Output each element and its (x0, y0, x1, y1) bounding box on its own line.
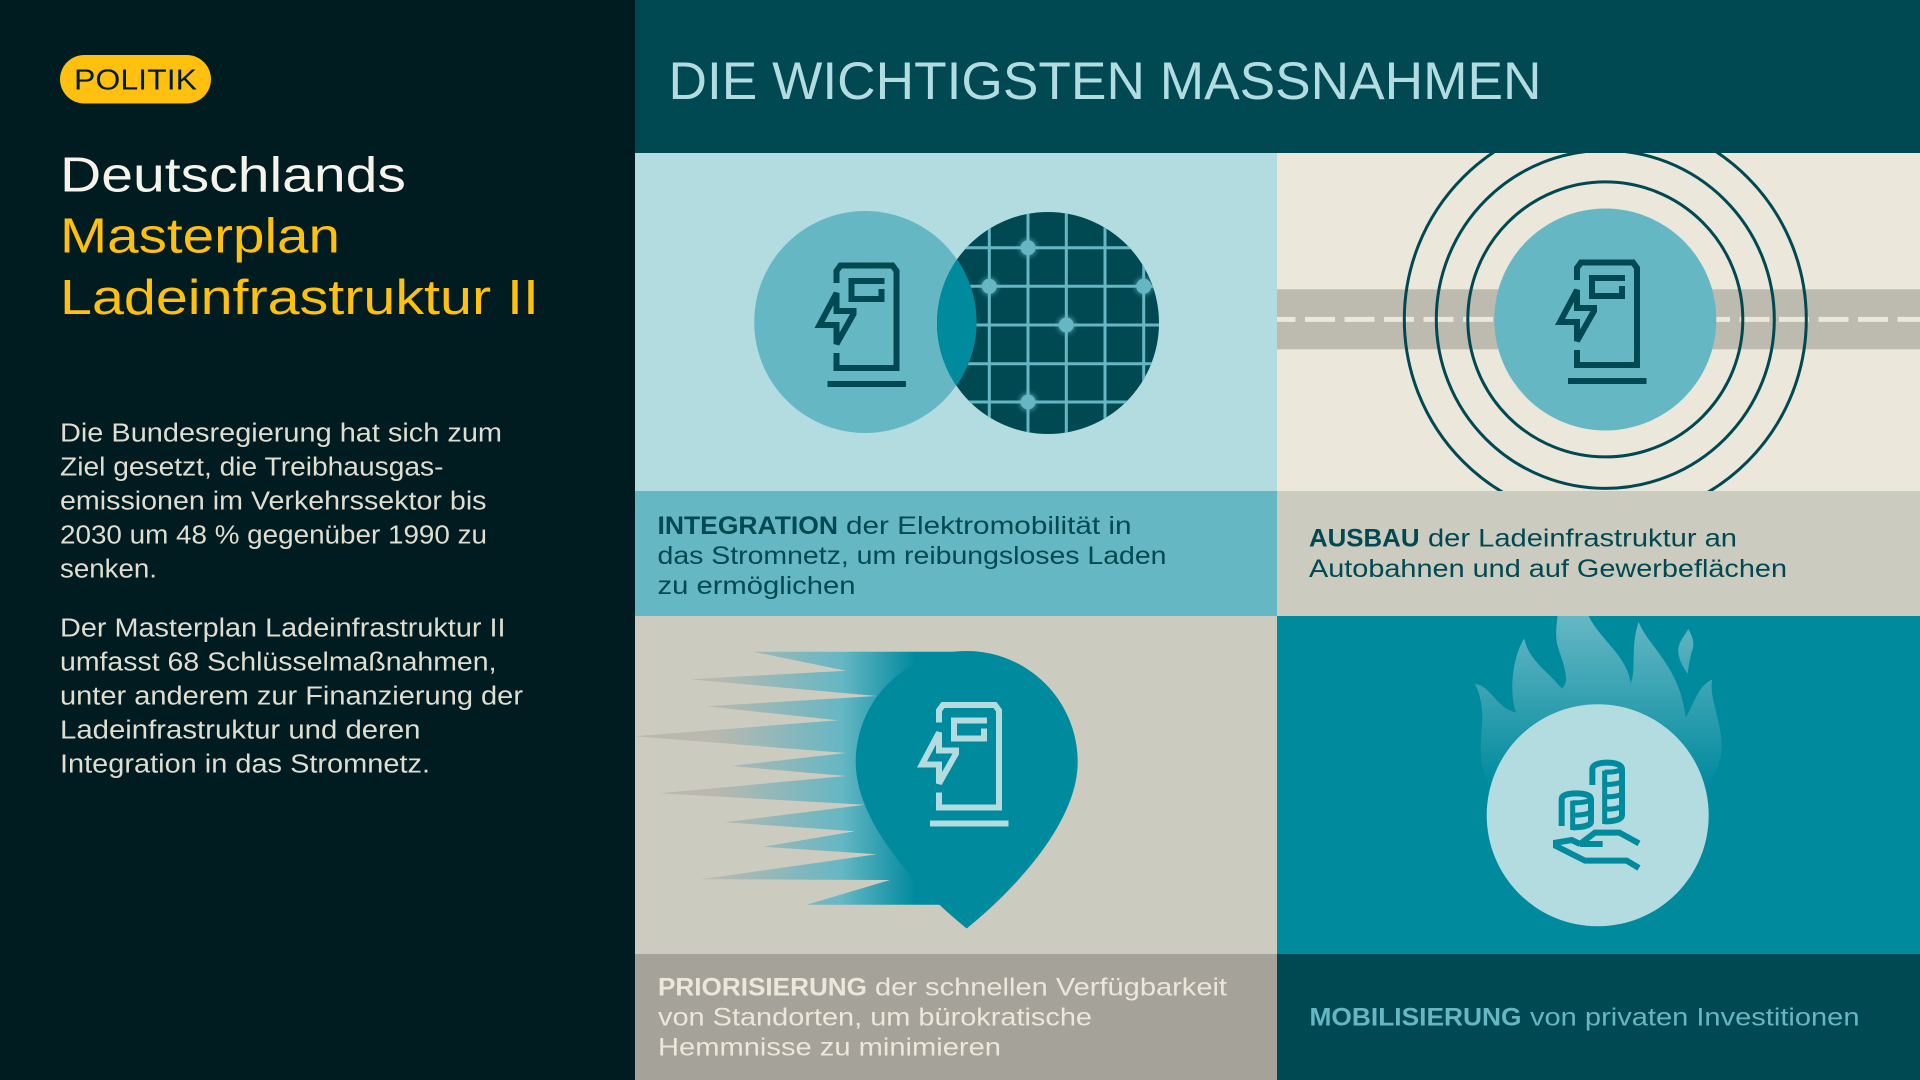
header band (635, 0, 1920, 153)
panel: Ausbau (1277, 118, 1920, 616)
caption: Ausbau: Autobahnen und auf Gewerbeflächen (1309, 555, 1787, 583)
caption: Mobilisierung: von privaten Investitionen (1530, 1004, 1860, 1032)
illustration: signal rings (1402, 153, 1808, 491)
text block: masterplan: Integration in das Stromnetz. (60, 751, 430, 779)
caption: Integration (635, 491, 1277, 616)
caption: Mobilisierung (1277, 954, 1920, 1080)
illustration: charger and power grid circles (754, 211, 1159, 434)
caption: Priorisierung: von Standorten, um bürokratische (658, 1004, 1092, 1032)
text block: goal: Ziel gesetzt, die Treibhausgas- (60, 454, 444, 482)
caption: Priorisierung: Hemmnisse zu minimieren (658, 1034, 1001, 1062)
text block: masterplan: Ladeinfrastruktur und deren (60, 717, 420, 745)
title: Ladeinfrastruktur II (60, 271, 539, 325)
icon: charging station (820, 266, 906, 384)
illustration: location pin (856, 651, 1078, 928)
panel: Mobilisierung (1277, 610, 1920, 1080)
icon: charging station (1560, 262, 1646, 381)
text block: goal (60, 420, 502, 584)
tag: POLITIK: POLITIK (74, 64, 198, 96)
tag: POLITIK (60, 55, 211, 104)
text block: goal: senken. (60, 556, 157, 584)
title (60, 149, 539, 325)
caption: Priorisierung (635, 954, 1277, 1080)
icon: charging station (922, 705, 1008, 824)
panel: Priorisierung (635, 616, 1277, 1080)
caption: Ausbau: der Ladeinfrastruktur an (1428, 525, 1737, 553)
caption: Integration: INTEGRATION (658, 512, 838, 540)
illustration: flames (1475, 616, 1722, 773)
title: Deutschlands (60, 149, 406, 203)
illustration: speed spikes (635, 652, 967, 905)
panel: left intro (0, 0, 635, 1080)
title: Masterplan (60, 210, 340, 264)
heading: DIE WICHTIGSTEN MASSNAHMEN (668, 52, 1542, 111)
caption: Integration: zu ermöglichen (658, 572, 856, 600)
caption: Integration: der Elektromobilität in (846, 512, 1132, 540)
caption: Integration: das Stromnetz, um reibungsloses Laden (658, 542, 1166, 570)
text block: goal: 2030 um 48 % gegenüber 1990 zu (60, 522, 487, 550)
caption: Mobilisierung: MOBILISIERUNG (1310, 1004, 1522, 1032)
caption: Priorisierung: der schnellen Verfügbarkeit (875, 974, 1227, 1002)
text block: masterplan: umfasst 68 Schlüsselmaßnahmen, (60, 649, 496, 677)
icon: coins on a hand (1556, 763, 1639, 868)
illustration: charger circle (1494, 208, 1716, 430)
caption: Priorisierung: PRIORISIERUNG (658, 974, 867, 1002)
panel: Integration (635, 153, 1277, 616)
text block: masterplan: Der Masterplan Ladeinfrastruktur II (60, 615, 505, 643)
illustration: motorway (1277, 289, 1920, 349)
text block: masterplan (60, 615, 524, 779)
caption: Ausbau: AUSBAU (1309, 525, 1420, 553)
illustration: circle with coins (1487, 704, 1709, 926)
text block: goal: Die Bundesregierung hat sich zum (60, 420, 502, 448)
text block: masterplan: unter anderem zur Finanzierung der (60, 683, 524, 711)
caption: Ausbau (1277, 491, 1920, 616)
text block: goal: emissionen im Verkehrssektor bis (60, 488, 487, 516)
